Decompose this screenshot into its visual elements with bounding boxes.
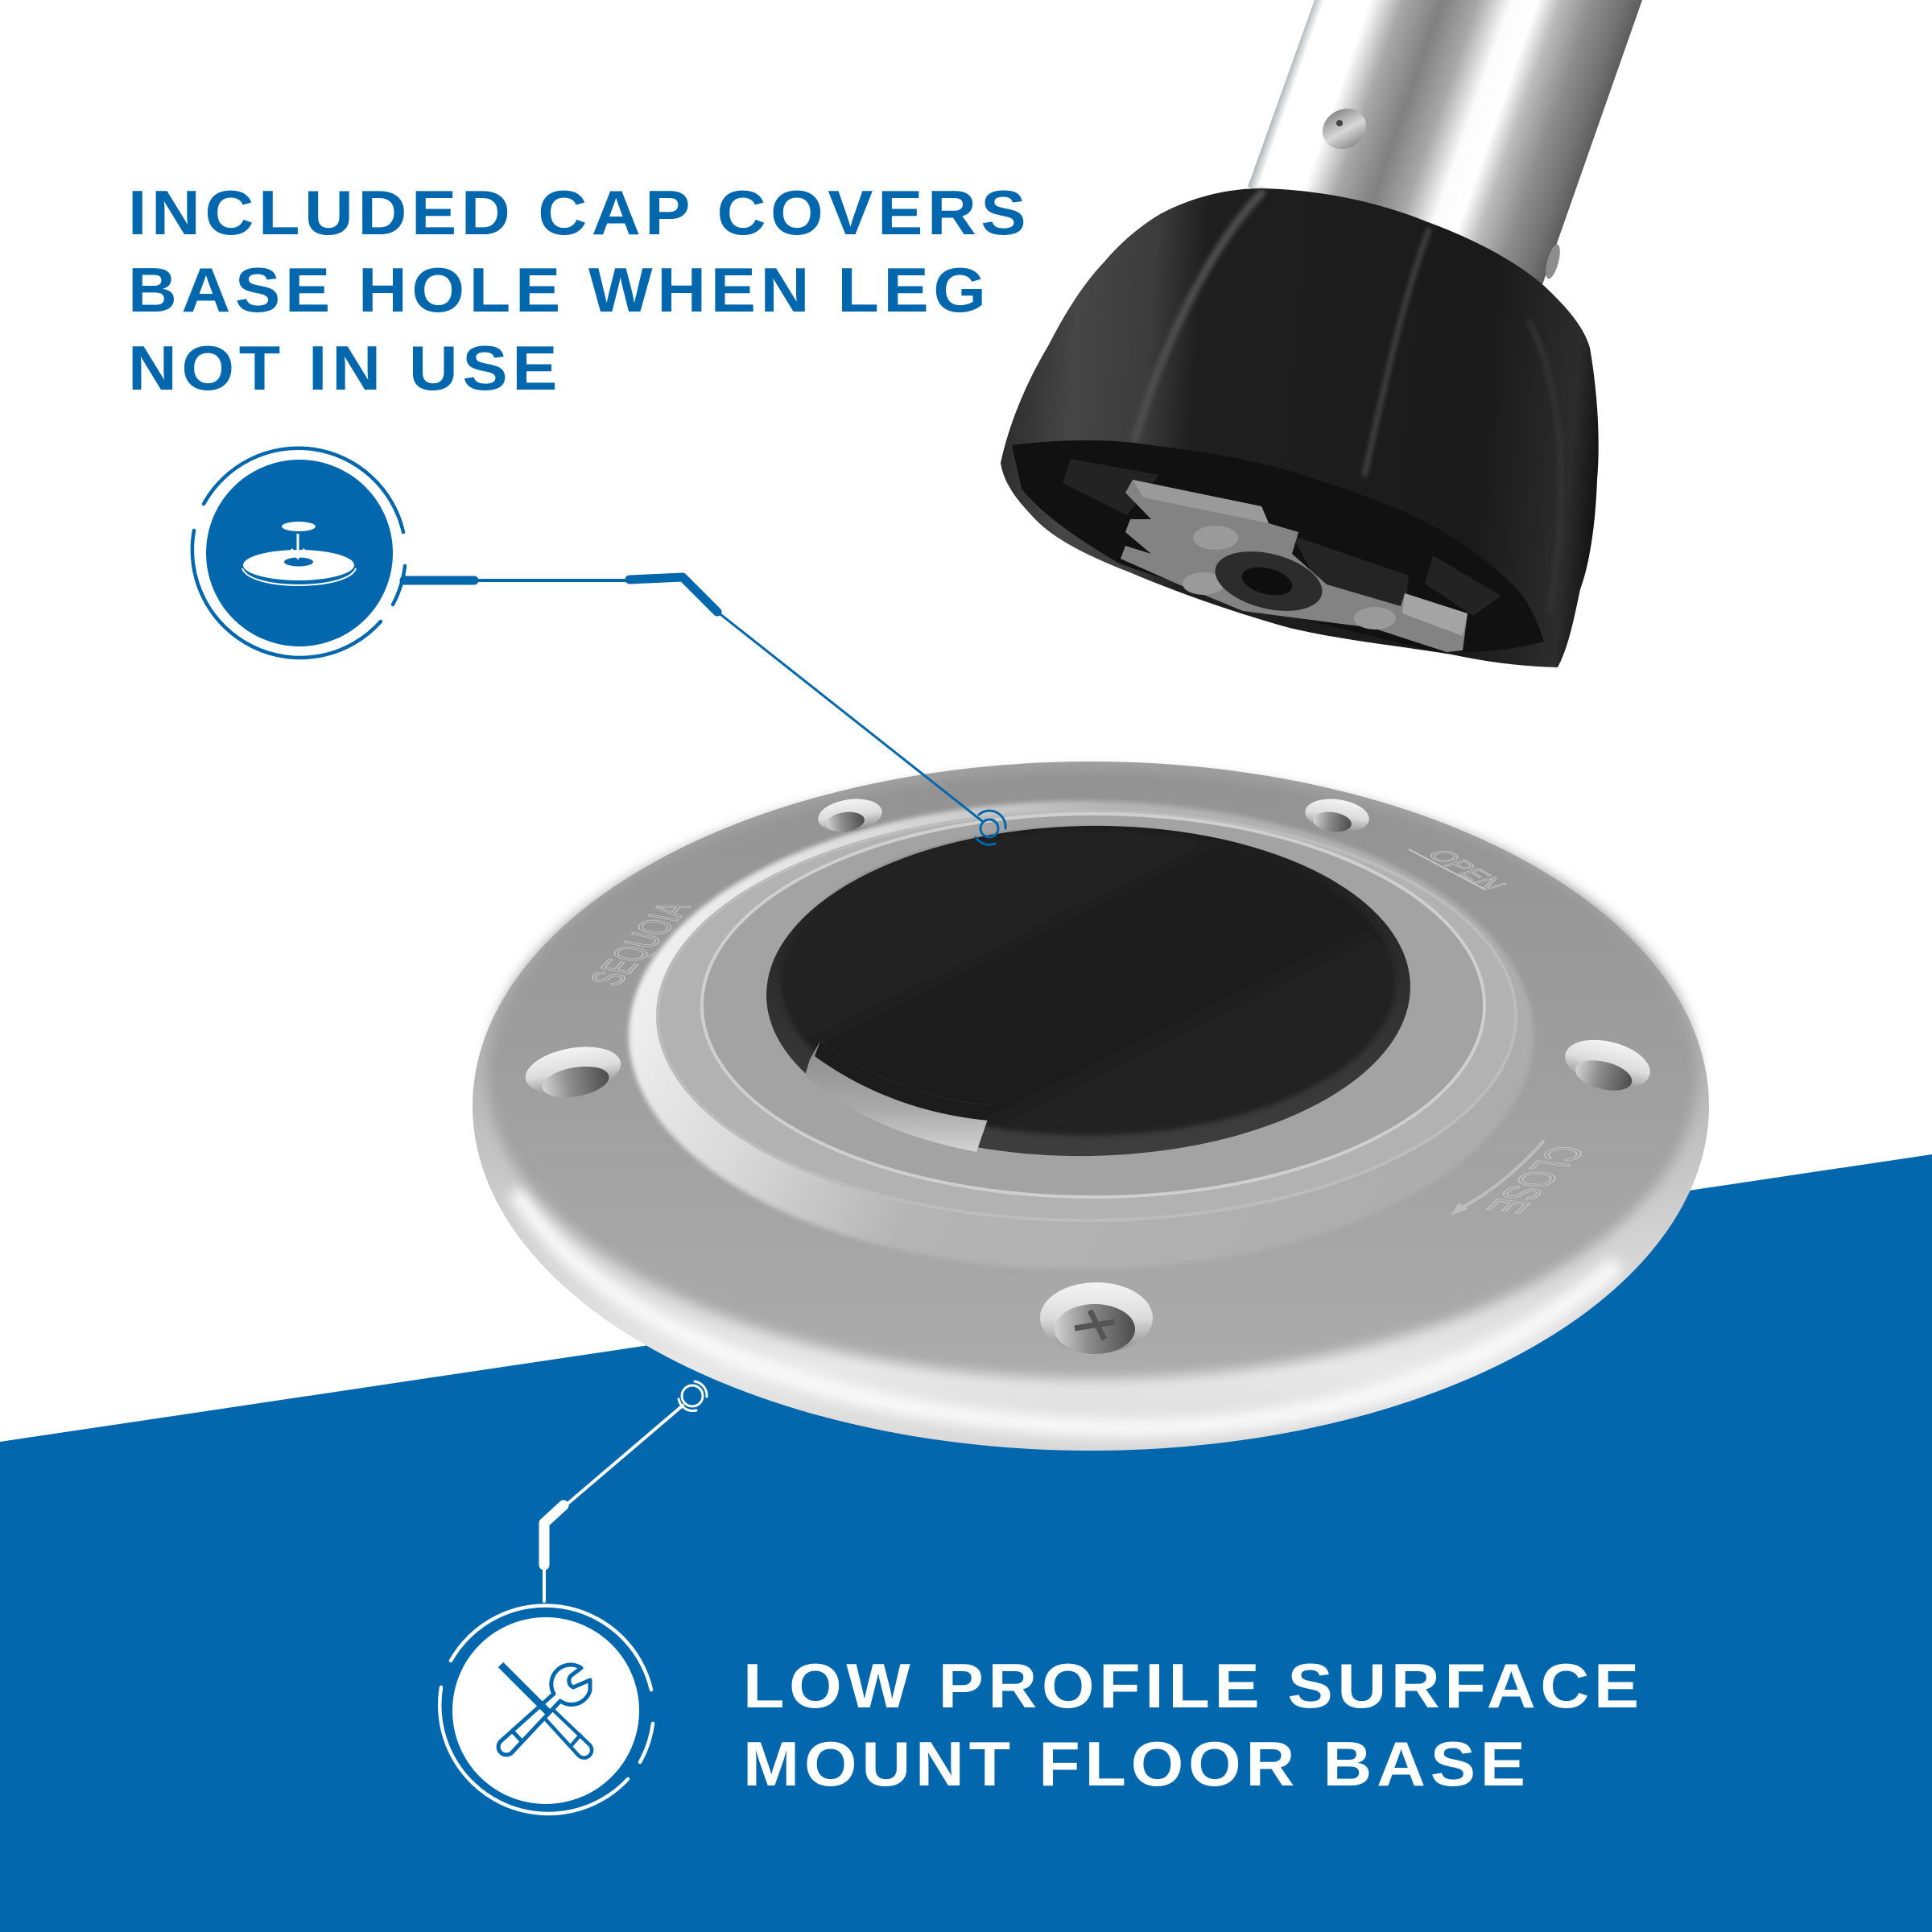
screw: left <box>522 1040 625 1102</box>
inner ribs <box>1063 459 1501 616</box>
inner ring <box>702 814 1484 1197</box>
base top face <box>487 770 1698 1379</box>
icon outer arcs <box>440 1605 653 1814</box>
black slab beside plate <box>1292 535 1409 612</box>
wrench <box>498 1665 590 1755</box>
heading: floor base: LOW PROFILE SURFACE <box>743 1652 1639 1721</box>
embossed text: SEQUOIA: SEQUOIA <box>580 899 700 989</box>
black cap top <box>781 829 1396 1135</box>
heading: included cap: NOT IN USE <box>128 334 557 403</box>
icon: cap dropping into base <box>192 448 405 658</box>
product: table leg with black foot <box>1001 0 1642 667</box>
screwdriver <box>501 1665 592 1758</box>
black cap rim <box>763 820 1414 1162</box>
heading: included cap: INCLUDED CAP COVERS <box>128 179 1026 248</box>
side pin <box>1543 243 1563 280</box>
plate bolt bosses <box>1183 526 1396 630</box>
heading: included cap: BASE HOLE WHEN LEG <box>128 256 986 325</box>
heading: floor base: MOUNT FLOOR BASE <box>743 1730 1525 1799</box>
cap glyph <box>282 522 316 531</box>
foot rib highlights <box>1135 193 1561 612</box>
embossed text: OPEN: OPEN <box>1419 847 1514 893</box>
icon: crossed tools <box>440 1605 653 1814</box>
disc glyph <box>243 550 354 580</box>
screw: right <box>1560 1032 1655 1096</box>
black foot body <box>1001 188 1599 667</box>
embossed text: CLOSE: CLOSE <box>1475 1143 1596 1216</box>
raised ring outer slope <box>629 801 1534 1269</box>
heading: included cap <box>128 179 1026 403</box>
target ring <box>679 1381 707 1411</box>
tube dimple <box>1315 101 1373 157</box>
centre socket <box>1209 542 1328 621</box>
product: surface mount floor base <box>473 762 1709 1451</box>
base outer rim <box>473 762 1709 1451</box>
arrow glyph <box>291 534 304 558</box>
icon outer arcs <box>192 448 405 658</box>
foot underside opening <box>1012 440 1544 652</box>
screw: top left <box>816 795 884 836</box>
cap notch <box>805 1041 993 1152</box>
heading: floor base <box>743 1652 1639 1799</box>
raised ring flat <box>658 811 1516 1220</box>
bottom rim highlight <box>515 1191 1618 1428</box>
aluminium tube <box>1248 0 1642 310</box>
callout connector: floor base <box>544 1381 707 1601</box>
screw: top right <box>1303 795 1371 836</box>
blue diagonal band <box>0 1154 1932 1932</box>
target ring <box>976 811 1005 844</box>
screw: bottom <box>1040 1282 1153 1354</box>
metal twist-lock plate <box>1121 480 1468 652</box>
callout connector: cap <box>404 577 1005 844</box>
